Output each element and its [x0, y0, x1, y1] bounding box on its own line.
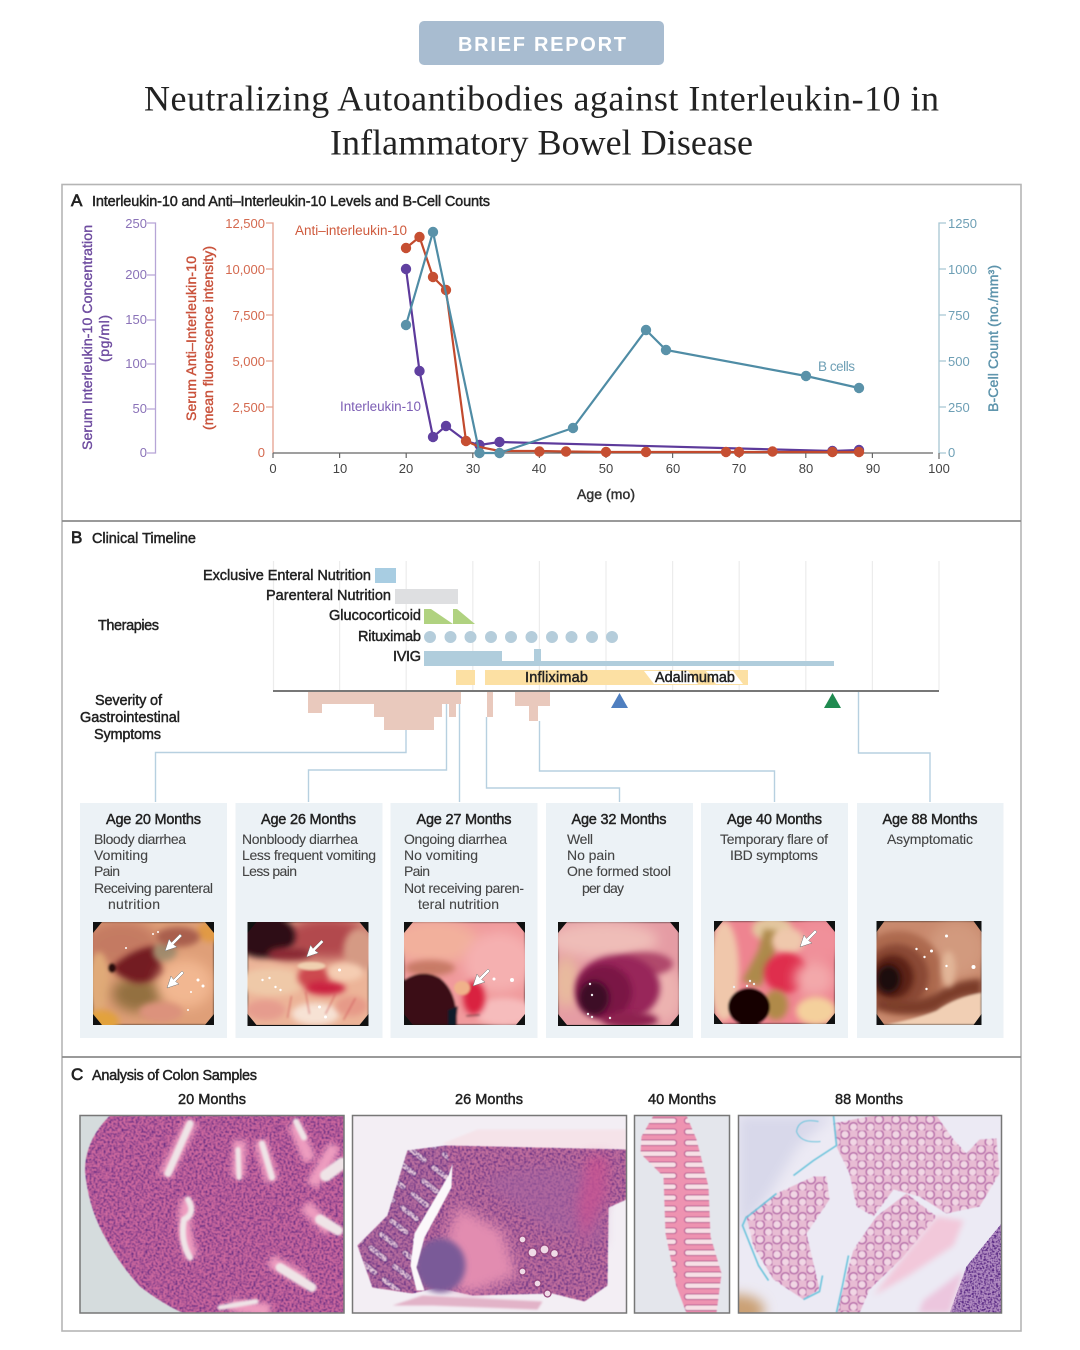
label: therapies: Therapies [98, 618, 159, 634]
x axis: age in months: 90 [866, 461, 880, 476]
card: age 88 months: Age 88 Months [882, 812, 978, 828]
purple axis: serum interleukin-10: 150 [125, 312, 147, 327]
histology: 20 months [80, 1116, 344, 1313]
therapy: glucocorticoid [329, 608, 475, 624]
endoscopy image, 32 months [558, 922, 679, 1026]
card: age 88 months: Asymptomatic [887, 831, 973, 847]
therapy: infliximab: Infliximab [525, 670, 588, 686]
x axis: age in months: 80 [799, 461, 813, 476]
endoscopy image, 27 months [404, 922, 525, 1025]
red axis: serum anti-interleukin-10: 7,500 [232, 308, 265, 323]
therapy: rituximab doses [358, 629, 618, 645]
sample label: 88 Months [835, 1092, 903, 1108]
red axis: serum anti-interleukin-10: 12,500 [225, 216, 265, 231]
histology: 88 months [738, 1114, 1002, 1314]
card: age 32 months: Age 32 Months [572, 812, 666, 828]
panel B: clinical timeline [71, 528, 1004, 1038]
red axis: serum anti-interleukin-10: 2,500 [232, 400, 265, 415]
card: age 26 months: Less pain [242, 863, 297, 879]
badge: brief report [419, 21, 664, 65]
label: severity of gastrointestinal symptoms [80, 693, 180, 743]
title: Neutralizing Autoantibodies against Interleukin-10 in [144, 78, 939, 118]
therapy: IVIG: IVIG [393, 649, 421, 665]
marker: green triangle [824, 693, 841, 708]
x axis: age in months: 100 [928, 461, 950, 476]
card: age 27 months: Pain [404, 863, 430, 879]
panel A heading: A [71, 191, 83, 210]
connector lines [156, 692, 930, 802]
purple axis: serum interleukin-10: (pg/ml) [96, 315, 112, 362]
x axis: age in months: 20 [399, 461, 413, 476]
card: age 26 months: Less frequent vomiting [242, 847, 376, 863]
card: age 32 months: No pain [567, 847, 615, 863]
therapy: adalimumab: Adalimumab [655, 670, 735, 686]
therapy: parenteral nutrition [266, 588, 458, 604]
purple axis: serum interleukin-10: Serum Interleukin-10 Concentration [79, 225, 95, 450]
histology: 26 months [352, 1116, 626, 1313]
endoscopy image, 40 months [714, 921, 835, 1024]
histology: 40 months [634, 1116, 730, 1313]
x axis: age in months: 40 [532, 461, 546, 476]
card: age 32 months: per day [582, 880, 624, 896]
line: interleukin-10 [340, 264, 864, 456]
card: age 27 months: teral nutrition [418, 896, 499, 912]
purple axis: serum interleukin-10: 250 [125, 216, 147, 231]
card: age 20 months: Pain [94, 863, 120, 879]
teal axis: B-cell count: 250 [948, 400, 970, 415]
x axis: age in months: 30 [466, 461, 480, 476]
card: age 27 months: No vomiting [404, 847, 478, 863]
card: age 32 months: One formed stool [567, 863, 671, 879]
marker: blue triangle [611, 693, 628, 708]
endoscopy image, 20 months [93, 922, 214, 1025]
sample label: 26 Months [455, 1092, 523, 1108]
card: age 27 months: Age 27 Months [416, 812, 512, 828]
teal axis: B-cell count: 1250 [948, 216, 977, 231]
card: age 26 months: Age 26 Months [261, 812, 356, 828]
sample label: 40 Months [648, 1092, 716, 1108]
icon: arrow [165, 934, 182, 951]
card: age 26 months: Nonbloody diarrhea [242, 831, 358, 847]
card: age 20 months: Vomiting [94, 847, 148, 863]
sample label: 20 Months [178, 1092, 246, 1108]
card: age 26 months [232, 803, 382, 1038]
therapy: rituximab doses: Rituximab [358, 629, 421, 645]
label: severity of gastrointestinal symptoms: Severity of [95, 693, 163, 709]
endoscopy image, 88 months [876, 921, 982, 1025]
panel C: colon samples [71, 1065, 1002, 1326]
card: age 27 months [389, 803, 538, 1038]
line: B cells: B cells [818, 359, 855, 374]
purple axis: serum interleukin-10: 100 [125, 356, 147, 371]
panel B heading: B [71, 528, 82, 547]
panel A heading: Interleukin-10 and Anti–Interleukin-10 Levels and B-Cell Counts [92, 194, 490, 210]
icon: arrow [306, 940, 324, 957]
panel A: levels and B-cell counts [71, 191, 1001, 502]
line: B cells [401, 227, 864, 458]
teal axis: B-cell count [939, 216, 1001, 460]
x axis: age in months [269, 453, 950, 502]
icon: arrow [167, 971, 184, 988]
card: age 32 months: Well [567, 831, 593, 847]
purple axis: serum interleukin-10: 200 [125, 267, 147, 282]
panel B heading: Clinical Timeline [92, 531, 196, 547]
red axis: serum anti-interleukin-10: 5,000 [232, 354, 265, 369]
therapy: parenteral nutrition: Parenteral Nutrition [266, 588, 391, 604]
x axis: age in months: 50 [599, 461, 613, 476]
purple axis: serum interleukin-10 [79, 216, 156, 460]
purple axis: serum interleukin-10: 50 [133, 401, 147, 416]
teal axis: B-cell count: 500 [948, 354, 970, 369]
icon: arrow [473, 969, 490, 986]
card: age 20 months: Bloody diarrhea [94, 831, 186, 847]
therapy: infliximab [456, 670, 645, 686]
panel frame [62, 184, 1021, 1331]
therapy: IVIG [393, 649, 834, 666]
teal axis: B-cell count: 750 [948, 308, 970, 323]
red axis: serum anti-interleukin-10: 0 [258, 445, 265, 460]
title [144, 78, 939, 162]
purple axis: serum interleukin-10: 0 [140, 445, 147, 460]
card: age 40 months: Temporary flare of [720, 831, 828, 847]
card: age 20 months [80, 803, 227, 1038]
x axis: age in months: 0 [269, 461, 277, 476]
panel C heading: C [71, 1065, 83, 1084]
card: age 20 months: nutrition [108, 896, 160, 912]
severity chart [308, 692, 550, 730]
label: severity of gastrointestinal symptoms: Symptoms [94, 727, 161, 743]
red axis: serum anti-interleukin-10: (mean fluorescence intensity) [200, 246, 216, 430]
card: age 40 months: Age 40 Months [727, 812, 822, 828]
card: age 27 months: Not receiving paren- [404, 880, 524, 896]
x axis: age in months: Age (mo) [577, 486, 635, 502]
red axis: serum anti-interleukin-10: Serum Anti–Interleukin-10 [183, 256, 199, 421]
card: age 32 months [546, 803, 693, 1038]
title: Inflammatory Bowel Disease [330, 122, 753, 162]
badge: brief report: BRIEF REPORT [458, 34, 626, 56]
card: age 20 months: Receiving parenteral [94, 880, 213, 896]
x axis: age in months: 70 [732, 461, 746, 476]
panel C heading: Analysis of Colon Samples [92, 1068, 257, 1084]
red axis: serum anti-interleukin-10 [183, 216, 273, 460]
therapy: exclusive enteral nutrition: Exclusive Enteral Nutrition [203, 568, 371, 584]
x axis: age in months: 60 [666, 461, 680, 476]
line: anti-interleukin-10 [295, 223, 864, 457]
teal axis: B-cell count: 1000 [948, 262, 977, 277]
card: age 88 months [854, 803, 1004, 1038]
therapy: glucocorticoid: Glucocorticoid [329, 608, 421, 624]
line: interleukin-10: Interleukin-10 [340, 399, 421, 414]
card: age 27 months: Ongoing diarrhea [404, 831, 507, 847]
x axis: age in months: 10 [333, 461, 347, 476]
red axis: serum anti-interleukin-10: 10,000 [225, 262, 265, 277]
card: age 40 months [701, 803, 848, 1038]
teal axis: B-cell count: 0 [948, 445, 955, 460]
teal axis: B-cell count: B-Cell Count (no./mm³) [985, 265, 1001, 412]
endoscopy image, 26 months [248, 922, 368, 1026]
icon: arrow [800, 930, 817, 947]
card: age 40 months: IBD symptoms [730, 847, 818, 863]
line: anti-interleukin-10: Anti–interleukin-10 [295, 223, 407, 238]
card: age 20 months: Age 20 Months [106, 812, 201, 828]
label: severity of gastrointestinal symptoms: Gastrointestinal [80, 710, 180, 726]
